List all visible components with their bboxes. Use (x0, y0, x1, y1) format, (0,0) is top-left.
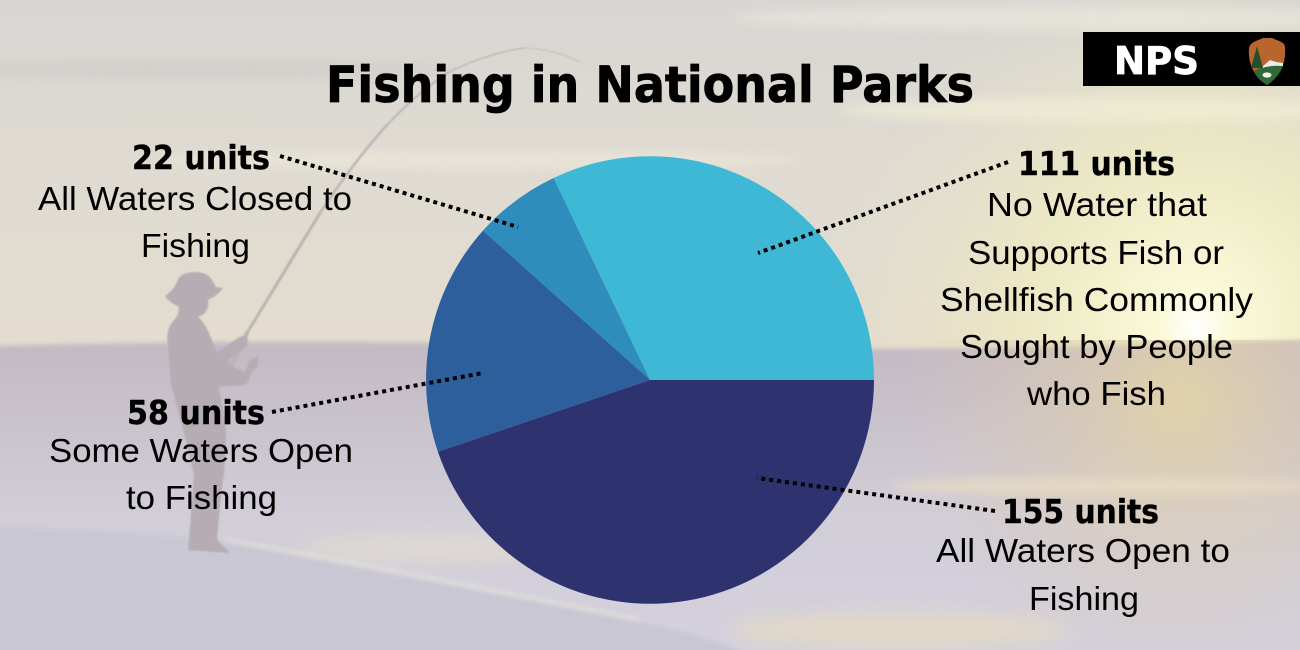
label: 111 units: No Water that (987, 186, 1207, 223)
label: 111 units: 111 units (1018, 144, 1175, 183)
leader line: 155 units (757, 478, 995, 511)
leader line: 22 units (280, 156, 518, 227)
label: 111 units: who Fish (1026, 375, 1166, 412)
label: 22 units: 22 units (132, 138, 270, 177)
label: 155 units: All Waters Open to (936, 532, 1230, 569)
icon: NPS arrowhead logo (1249, 38, 1285, 85)
label: 22 units (38, 138, 352, 264)
label: 22 units: All Waters Closed to (38, 180, 352, 217)
label: 111 units: Shellfish Commonly (940, 281, 1254, 318)
label: 155 units: Fishing (1029, 580, 1139, 617)
leader line: 58 units (272, 373, 483, 412)
fisherman silhouette with rod (165, 48, 580, 553)
pie chart (426, 156, 874, 604)
label: 58 units: to Fishing (126, 479, 277, 516)
slice: 155 units (438, 380, 874, 604)
label: 58 units: 58 units (127, 393, 265, 432)
title: Fishing in National Parks (326, 56, 974, 114)
leader line: 111 units (758, 162, 1008, 253)
label: 22 units: Fishing (141, 227, 250, 264)
label: 111 units (940, 144, 1254, 412)
label: 155 units (936, 492, 1230, 617)
NPS badge: NPS (1114, 39, 1199, 83)
label: 111 units: Sought by People (960, 328, 1233, 365)
NPS badge (1083, 32, 1300, 86)
label: 58 units: Some Waters Open (49, 432, 353, 469)
slice: 58 units (426, 231, 650, 452)
angler figure (165, 272, 258, 553)
label: 111 units: Supports Fish or (968, 234, 1224, 271)
slice: 111 units (554, 156, 874, 380)
fishing rod (226, 48, 580, 378)
slice: 22 units (483, 178, 650, 380)
label: 155 units: 155 units (1002, 492, 1159, 531)
label: 58 units (49, 393, 353, 516)
